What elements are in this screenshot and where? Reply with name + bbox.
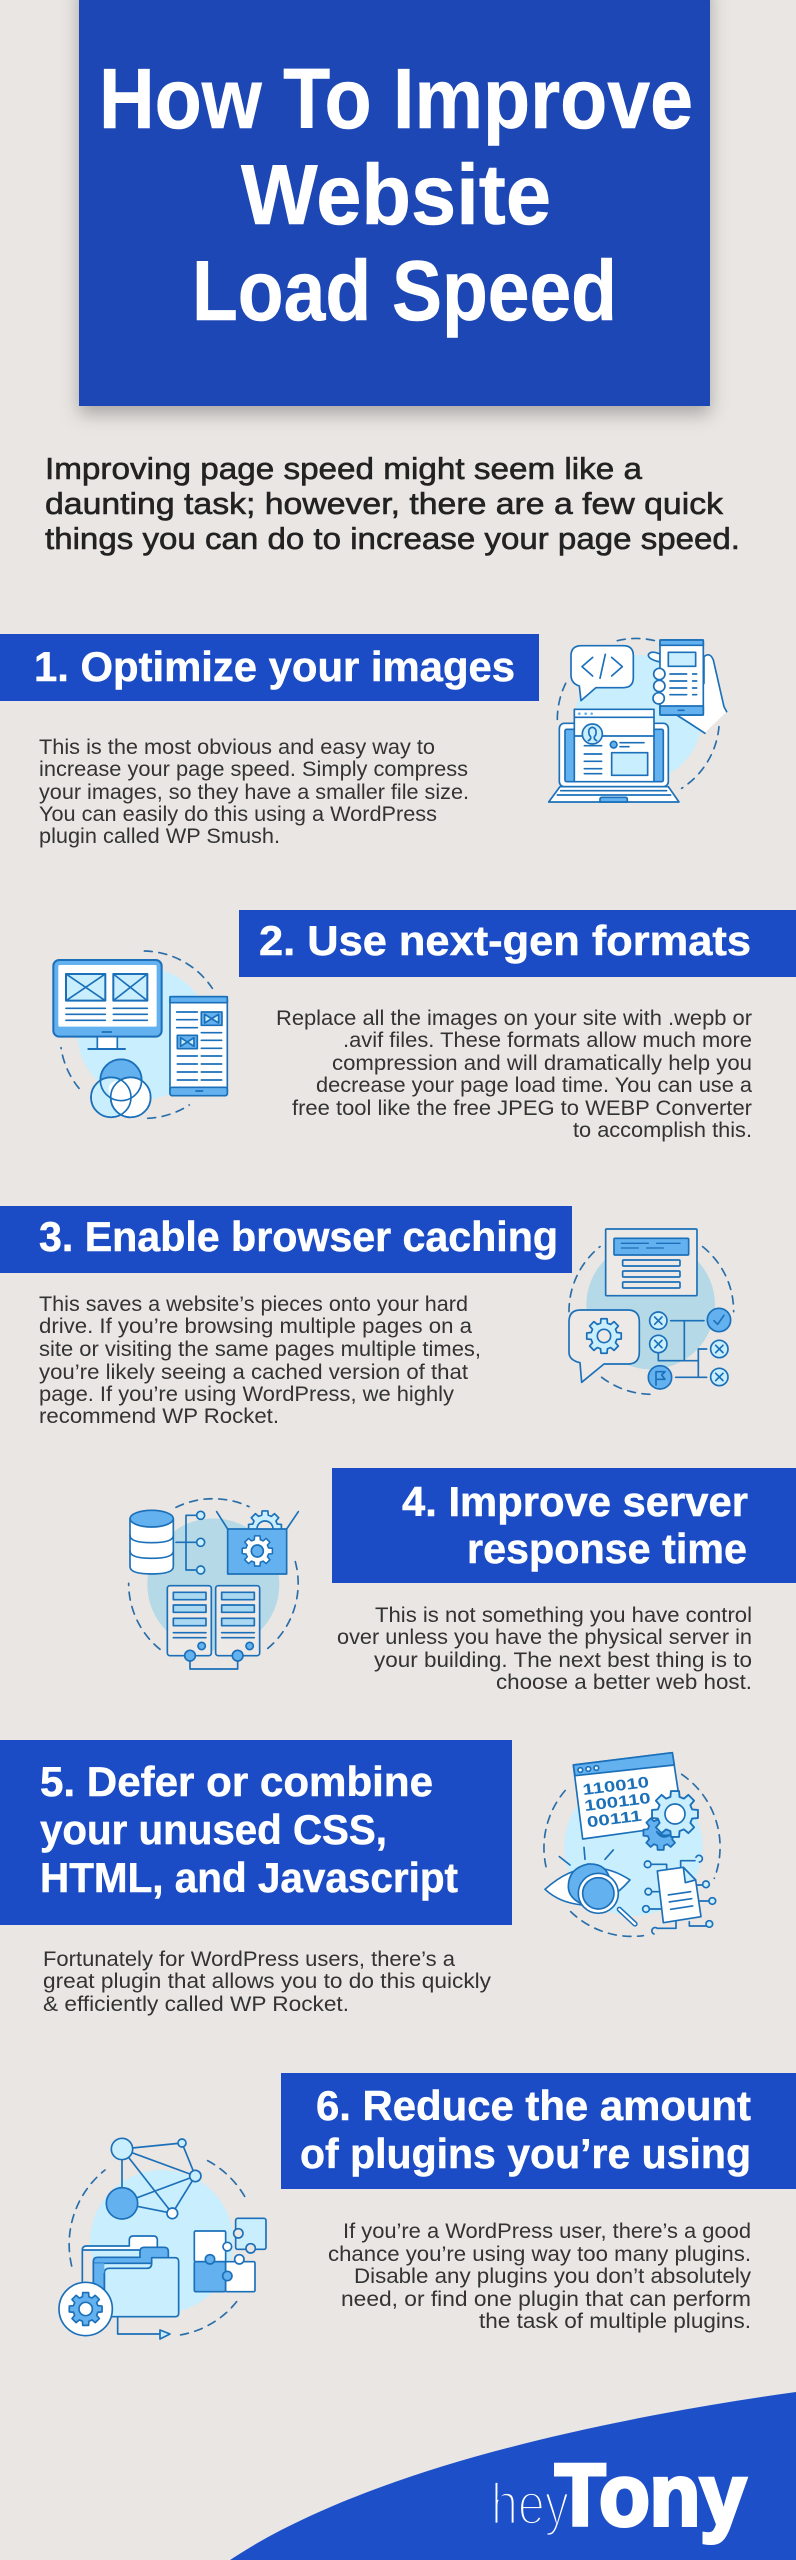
body text 3: This saves a website’s pieces onto your hard [39,1293,468,1316]
body text 1: increase your page speed. Simply compress [39,758,468,781]
body text 2: compression and will dramatically help you [332,1052,752,1075]
heading 4: response time [467,1525,747,1572]
heading 4 [332,1468,796,1583]
title: Load Speed [192,244,617,339]
panel: section 3 [0,1206,734,1428]
heading 4: 4. Improve server [402,1478,748,1525]
body text 6: chance you’re using way too many plugins. [328,2243,751,2266]
heading 5 [0,1740,512,1925]
body text 2: Replace all the images on your site with .wepb or [276,1007,752,1030]
heading 6: of plugins you’re using [300,2130,751,2177]
body text 3: recommend WP Rocket. [39,1405,279,1428]
heading 5: 5. Defer or combine [40,1758,433,1805]
body text 1: plugin called WP Smush. [39,825,280,848]
body text 5: Fortunately for WordPress users, there’s a [43,1948,455,1971]
heading 6: 6. Reduce the amount [316,2082,751,2129]
intro text: Improving page speed might seem like a [45,451,643,486]
footer curve with logo [230,2392,796,2560]
panel: section 1 [0,634,727,848]
icon: plugins network [59,2138,266,2339]
footer curve [230,2392,796,2560]
icon: browser cache settings [569,1229,734,1394]
body text 4: your building. The next best thing is to [374,1649,752,1672]
body text 5: great plugin that allows you to do this quickly [43,1970,492,1993]
body text 1: You can easily do this using a WordPress [39,803,437,826]
body text 6 [328,2220,752,2333]
body text 3: you’re likely seeing a cached version of that [39,1361,468,1384]
icon: code review: 00111 [586,1808,643,1831]
body text 2 [276,1007,752,1142]
heading 5: your unused CSS, [40,1806,387,1853]
intro text: things you can do to increase your page speed. [45,521,740,556]
heading 1: 1. Optimize your images [34,643,515,690]
title: How To Improve [99,52,693,147]
icon: code review [544,1753,720,1936]
body text 3: page. If you’re using WordPress, we highly [39,1383,455,1406]
heading 2 [239,910,796,977]
intro text [45,451,740,556]
title: Website [241,148,551,243]
body text 4: over unless you have the physical server in [337,1626,752,1649]
icon: code review: 110010 [582,1774,650,1799]
icon: servers and database [129,1499,298,1669]
heading 6 [281,2073,796,2189]
body text 6: need, or find one plugin that can perform [341,2288,751,2311]
panel: section 2 [53,910,796,1142]
title [79,0,710,406]
heading 1 [0,634,539,701]
heading 2: 2. Use next-gen formats [259,917,751,964]
icon: responsive images [53,951,227,1118]
icon: web and mobile code [549,638,727,802]
logo: heyTony: hey [491,2472,569,2537]
icon: code review: 100110 [583,1790,652,1815]
heading 3 [0,1206,572,1273]
panel: section 4 [129,1468,796,1694]
body text 2: free tool like the free JPEG to WEBP Converter [292,1097,752,1120]
logo: heyTony: Tony [555,2447,746,2544]
body text 1: This is the most obvious and easy way to [39,736,435,759]
heading 3: 3. Enable browser caching [39,1213,558,1260]
body text 5: & efficiently called WP Rocket. [43,1993,349,2016]
body text 4 [337,1604,752,1694]
body text 1: your images, so they have a smaller file size. [39,781,469,804]
panel: section 5 [0,1740,720,2016]
body text 2: to accomplish this. [573,1119,752,1142]
panel: section 6 [59,2073,796,2339]
body text 4: choose a better web host. [496,1671,752,1694]
body text 4: This is not something you have control [375,1604,752,1627]
intro text: daunting task; however, there are a few quick [45,486,724,521]
body text 2: decrease your page load time. You can use a [316,1074,752,1097]
body text 6: Disable any plugins you don’t absolutely [354,2265,752,2288]
body text 3: site or visiting the same pages multiple times, [39,1338,481,1361]
body text 6: If you’re a WordPress user, there’s a good [343,2220,751,2243]
body text 3 [39,1293,481,1428]
body text 5 [43,1948,492,2016]
body text 2: .avif files. These formats allow much more [343,1029,752,1052]
body text 3: drive. If you’re browsing multiple pages on a [39,1315,472,1338]
body text 1 [39,736,469,848]
heading 5: HTML, and Javascript [40,1854,458,1901]
body text 6: the task of multiple plugins. [479,2310,751,2333]
